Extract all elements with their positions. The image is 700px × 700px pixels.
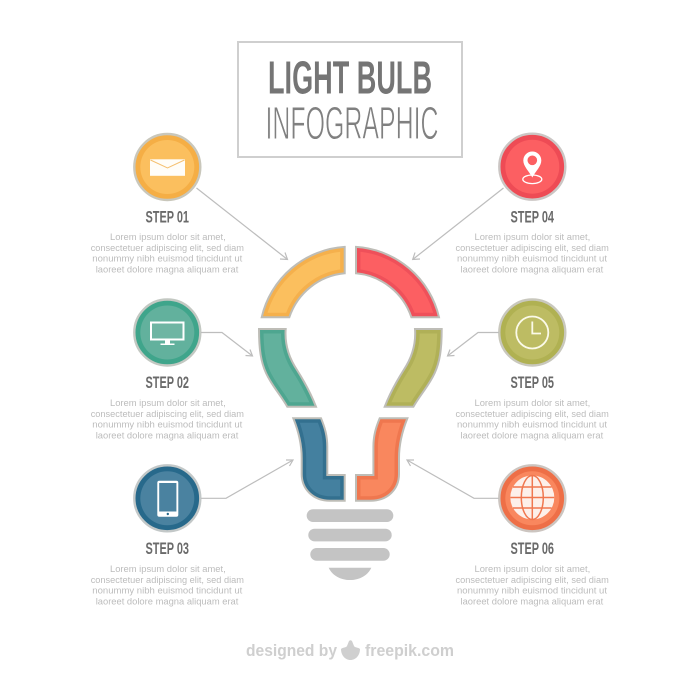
- arrow: step 05 to olive segment: [448, 332, 499, 356]
- panel: step 01: [91, 134, 244, 275]
- description text: Lorem ipsum dolor sit amet,: [110, 232, 226, 243]
- description text: nonummy nibh euismod tincidunt ut: [92, 586, 243, 596]
- description text: [91, 232, 244, 275]
- icon circle: globe: [499, 465, 565, 531]
- footer credit: designed by: [246, 641, 337, 660]
- description text: nonummy nibh euismod tincidunt ut: [92, 254, 243, 264]
- icon circle: monitor: [134, 300, 200, 366]
- description text: laoreet dolore magna aliquam erat: [96, 430, 239, 441]
- arrow: step 04 to red segment: [413, 188, 504, 260]
- footer credit: freepik.com: [365, 641, 454, 660]
- bulb segment: blue: [293, 418, 345, 501]
- step label: STEP 03: [146, 539, 189, 558]
- step label: STEP 05: [510, 373, 554, 392]
- description text: consectetuer adipiscing elit, sed diam: [91, 409, 244, 420]
- bulb segment: orange: [356, 418, 407, 501]
- bulb segment: olive: [385, 329, 442, 407]
- icon circle: tablet: [134, 465, 200, 531]
- description text: laoreet dolore magna aliquam erat: [460, 596, 604, 607]
- panel: step 03: [91, 465, 244, 607]
- description text: [456, 232, 609, 275]
- description text: laoreet dolore magna aliquam erat: [96, 264, 239, 275]
- description text: Lorem ipsum dolor sit amet,: [474, 232, 590, 243]
- description text: nonummy nibh euismod tincidunt ut: [457, 420, 607, 430]
- step label: STEP 04: [510, 207, 554, 226]
- description text: nonummy nibh euismod tincidunt ut: [457, 586, 607, 596]
- title box: [238, 42, 462, 157]
- icon: freepik logo: [341, 640, 360, 660]
- bulb base: [307, 509, 393, 580]
- description text: consectetuer adipiscing elit, sed diam: [456, 409, 609, 420]
- arrow: step 06 to orange segment: [407, 460, 499, 498]
- panel: step 05: [456, 300, 609, 441]
- heading: infographic: INFOGRAPHIC: [266, 97, 438, 149]
- arrow: step 01 to yellow segment: [196, 188, 288, 260]
- description text: [456, 398, 609, 441]
- description text: laoreet dolore magna aliquam erat: [96, 596, 239, 607]
- description text: laoreet dolore magna aliquam erat: [460, 430, 604, 441]
- description text: laoreet dolore magna aliquam erat: [460, 264, 604, 275]
- description text: nonummy nibh euismod tincidunt ut: [92, 420, 243, 430]
- panel: step 02: [91, 300, 244, 441]
- description text: consectetuer adipiscing elit, sed diam: [91, 243, 244, 254]
- description text: consectetuer adipiscing elit, sed diam: [456, 575, 609, 586]
- description text: [91, 564, 244, 607]
- description text: [91, 398, 244, 441]
- step label: STEP 01: [146, 207, 189, 226]
- description text: Lorem ipsum dolor sit amet,: [474, 564, 590, 575]
- description text: nonummy nibh euismod tincidunt ut: [457, 254, 607, 264]
- footer credit: [246, 640, 454, 660]
- description text: consectetuer adipiscing elit, sed diam: [456, 243, 609, 254]
- description text: Lorem ipsum dolor sit amet,: [474, 398, 590, 409]
- panel: step 04: [456, 134, 609, 275]
- icon circle: map pin: [499, 134, 565, 200]
- arrow: step 03 to blue segment: [201, 460, 293, 498]
- panel: step 06: [456, 465, 609, 607]
- step label: STEP 06: [510, 539, 554, 558]
- icon circle: clock: [499, 300, 565, 366]
- bulb segment: teal: [259, 329, 316, 407]
- description text: consectetuer adipiscing elit, sed diam: [91, 575, 244, 586]
- bulb segment: red: [356, 247, 439, 317]
- light bulb: [259, 247, 442, 580]
- description text: Lorem ipsum dolor sit amet,: [110, 398, 226, 409]
- icon circle: envelope: [134, 134, 200, 200]
- bulb segment: yellow: [262, 247, 345, 317]
- arrow: step 02 to teal segment: [201, 332, 252, 356]
- description text: Lorem ipsum dolor sit amet,: [110, 564, 226, 575]
- description text: [456, 564, 609, 607]
- heading: light bulb: LIGHT BULB: [268, 52, 432, 104]
- step label: STEP 02: [146, 373, 189, 392]
